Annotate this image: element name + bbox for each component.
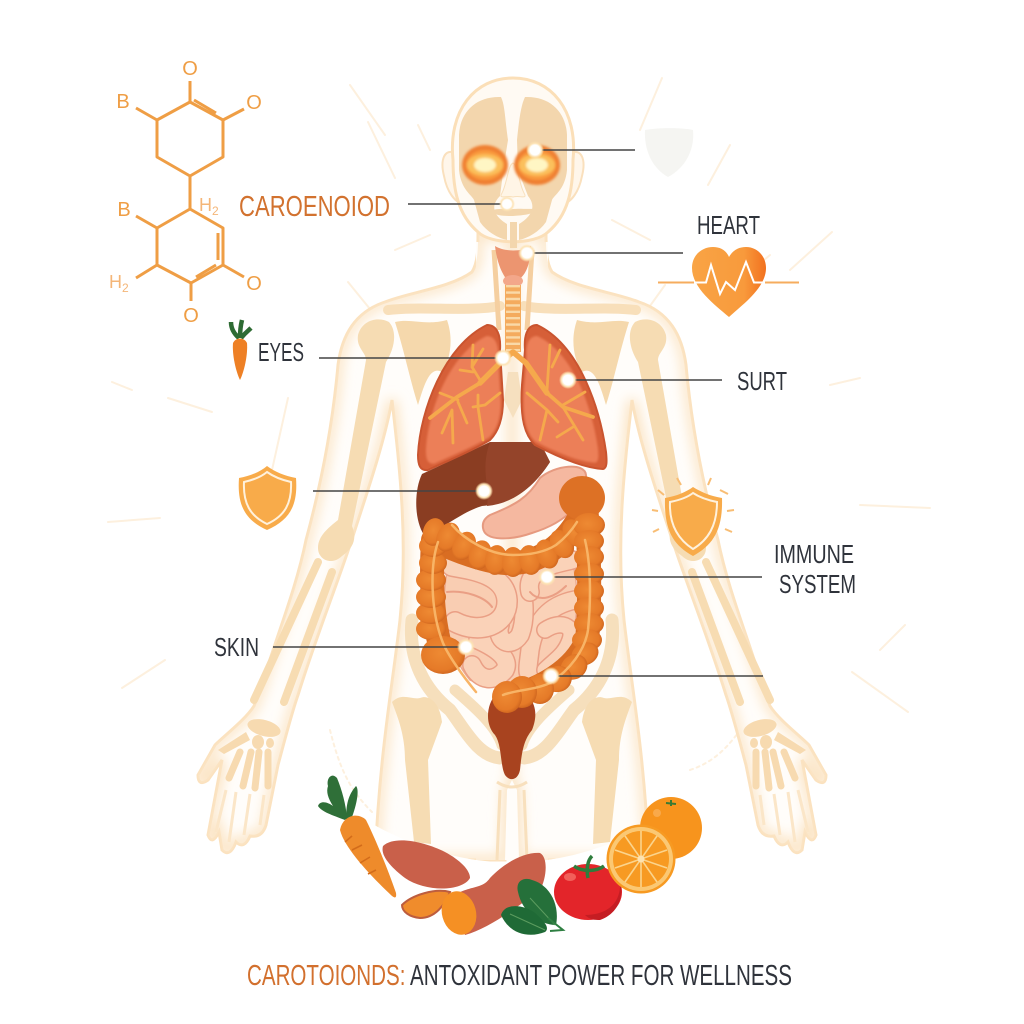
title: CAROTOIONDS: ANTOXIDANT POWER FOR WELLNESS [247,960,792,992]
orange whole [640,797,702,859]
human body figure [198,232,826,860]
liver [416,442,550,535]
sweet potato left [383,840,470,888]
spinach [501,879,563,935]
label: EYES: EYES [258,337,304,367]
eyes glowing [462,145,560,185]
molecule diagram: O [246,92,262,114]
orange slice [606,824,676,894]
molecule diagram: O [182,58,198,80]
colon band lines [433,522,590,695]
icon: left shield [239,466,296,530]
icon: faint shield [645,128,693,177]
descending colon [492,476,605,713]
food group [318,776,702,939]
left lung [418,325,503,470]
label: IMMUNE SYSTEM [774,539,856,599]
label: CAROENOIOD: CAROENOIOD [239,191,390,223]
sweet potato slice [402,891,450,918]
transverse colon [420,514,593,577]
stomach [483,467,586,538]
icon: heart with ECG [658,247,799,317]
carrot [318,776,396,897]
rectum [488,694,535,779]
bronchi [430,345,593,443]
right lung [522,325,607,469]
molecule diagram: 2 [122,281,129,295]
small intestine [444,560,577,688]
molecule diagram: B [116,91,130,113]
icon: right shield with rays [652,478,734,556]
molecule diagram: O [183,305,199,327]
sweet potato right [437,853,546,939]
head [442,78,584,248]
label: SURT: SURT [737,366,787,396]
body silhouette [198,232,826,860]
label: IMMUNE SYSTEM: IMMUNE [774,539,854,569]
large intestine colon [416,476,605,713]
colon base tube [432,505,589,697]
molecule diagram: O [246,273,262,295]
tomato [554,856,622,920]
connector lines [273,150,763,676]
molecule diagram: H [199,195,212,215]
icon: small carrot [231,320,251,380]
molecule diagram [109,58,262,327]
marker dots [457,141,577,685]
molecule diagram: H [109,272,122,292]
background radiating rays [108,78,930,812]
label: SKIN: SKIN [214,632,259,662]
skeleton [216,306,808,860]
label: IMMUNE SYSTEM: SYSTEM [779,569,856,599]
molecule diagram: 2 [212,204,219,218]
thyroid and trachea [494,246,532,418]
label: HEART: HEART [697,210,760,240]
molecule diagram: B [117,199,131,221]
ascending colon [416,535,465,674]
skull patches [459,97,567,240]
